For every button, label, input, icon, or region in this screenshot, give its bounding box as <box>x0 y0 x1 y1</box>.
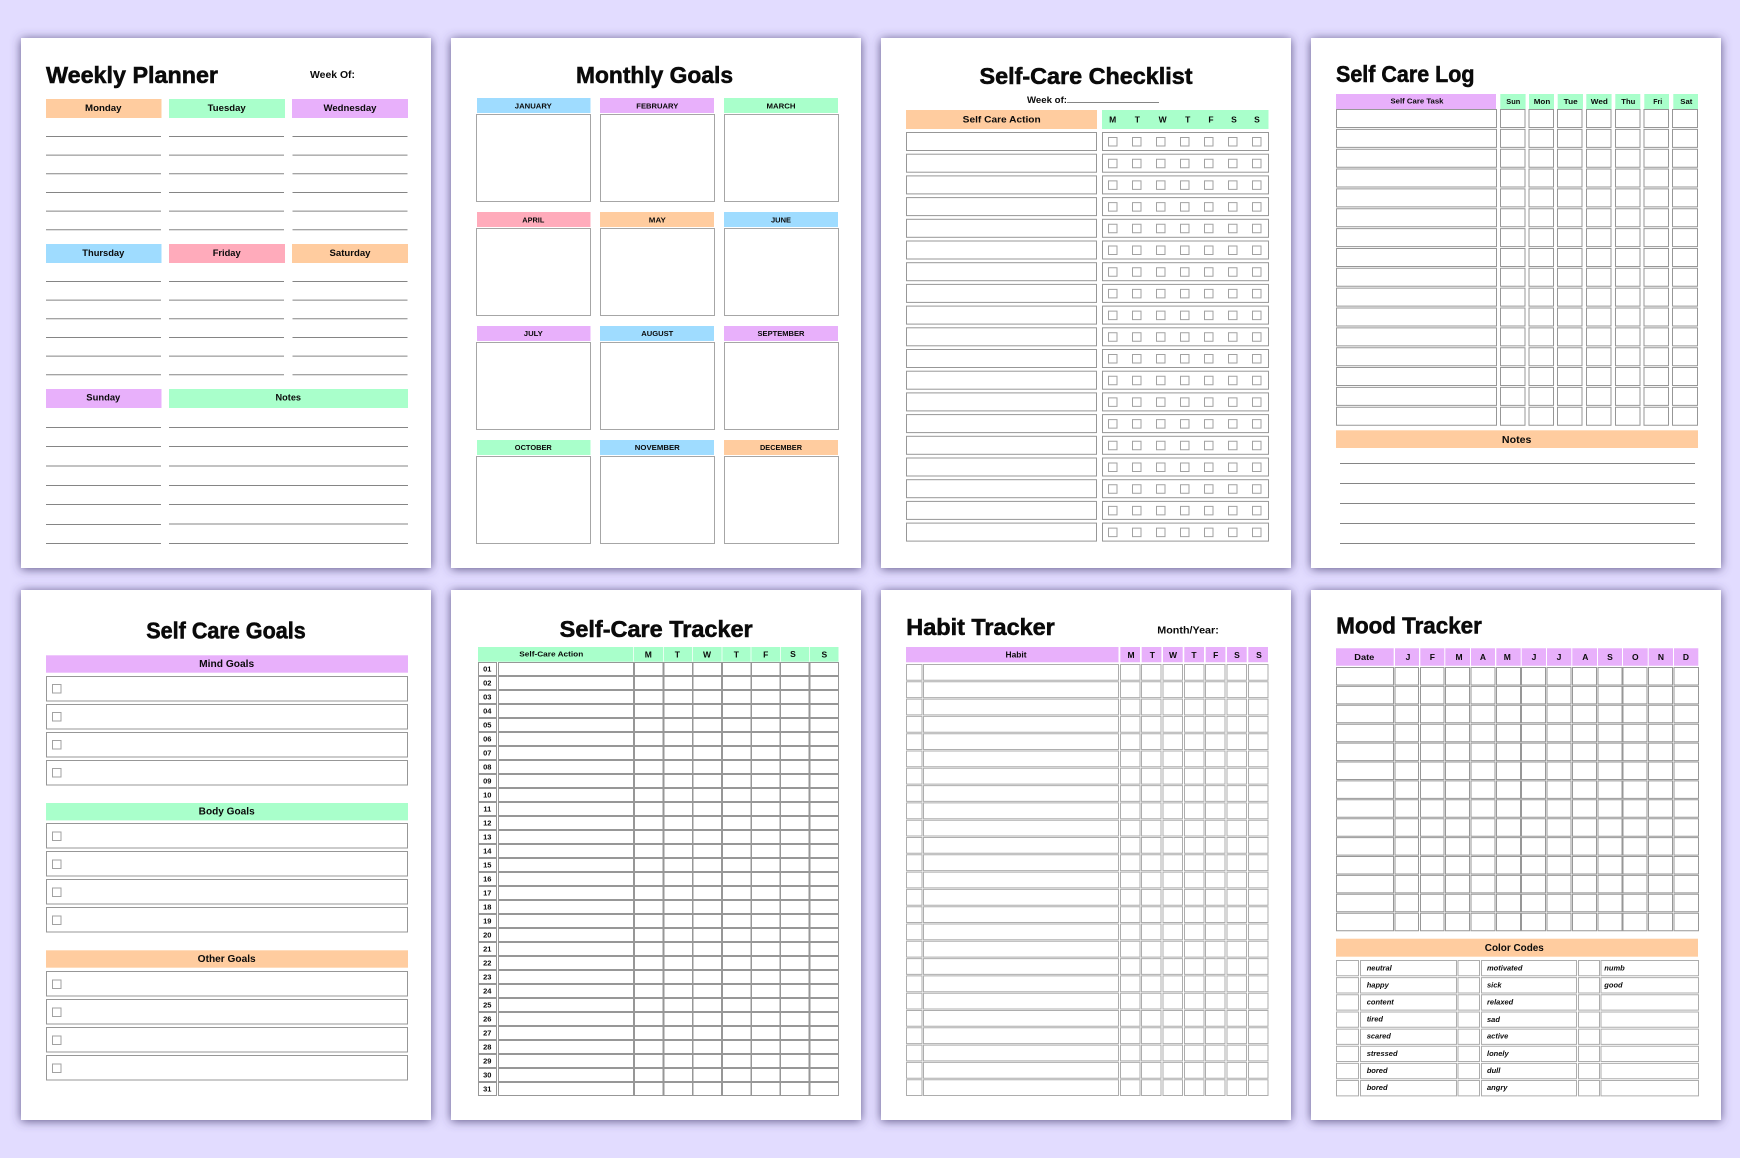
table header: M <box>1127 650 1135 660</box>
day headers row 1 <box>46 99 408 118</box>
table header <box>906 110 1268 129</box>
color codes rows <box>1336 960 1698 1096</box>
month headers: NOVEMBER <box>635 443 680 452</box>
table header: O <box>1632 652 1639 662</box>
color codes labels: motivated <box>1487 964 1523 972</box>
table header: W <box>703 650 712 660</box>
row numbers: 24 <box>483 986 492 996</box>
table header: J <box>1532 652 1537 662</box>
table header: M <box>1504 652 1511 662</box>
table header <box>1336 94 1698 109</box>
writing lines row 3 <box>46 428 408 544</box>
color codes labels: happy <box>1367 980 1390 990</box>
row numbers: 28 <box>483 1042 491 1052</box>
table header: W <box>1159 114 1168 124</box>
table header: Thu <box>1621 97 1636 106</box>
row numbers: 06 <box>483 734 491 744</box>
row numbers: 14 <box>483 846 492 856</box>
section: Mind Goals: Mind Goals <box>199 659 255 670</box>
label: Week Of: Week Of: <box>310 69 355 81</box>
color codes labels: numb <box>1604 964 1625 972</box>
panel: Self-Care Checklist <box>881 38 1291 568</box>
panel: Mood Tracker <box>1311 590 1721 1120</box>
row numbers: 11 <box>483 804 491 814</box>
row numbers: 05 <box>483 720 491 730</box>
title: Monthly Goals: Monthly Goals <box>576 62 733 88</box>
table header: Habit <box>1006 650 1027 660</box>
table header: Mon <box>1534 97 1551 106</box>
table header: A <box>1582 652 1588 662</box>
day headers row 1: Monday <box>85 103 122 114</box>
Sunday and Notes headers: Sunday <box>86 392 121 404</box>
table header: Date <box>1354 653 1375 662</box>
mood grid <box>1336 668 1698 931</box>
panel: Self Care Goals <box>21 590 431 1120</box>
notes header <box>1336 430 1698 448</box>
row numbers: 23 <box>483 972 491 982</box>
table header: F <box>1430 652 1435 662</box>
table header: T <box>1191 650 1197 660</box>
row numbers: 12 <box>483 818 491 828</box>
title: Habit Tracker: Habit Tracker <box>906 614 1055 640</box>
notes lines <box>1340 464 1695 544</box>
row numbers: 03 <box>483 692 491 702</box>
table header: T <box>734 650 740 660</box>
month headers: JANUARY <box>515 102 552 110</box>
table header: M <box>1109 114 1116 124</box>
row numbers: 08 <box>483 762 491 772</box>
row numbers: 25 <box>483 1000 491 1010</box>
color codes labels: tired <box>1367 1014 1383 1024</box>
color codes header: Color Codes <box>1485 943 1544 954</box>
section: Other Goals <box>46 950 408 1080</box>
table header: T <box>1185 114 1191 124</box>
month headers: SEPTEMBER <box>758 329 805 338</box>
table header: T <box>1135 114 1141 124</box>
title: Self Care Log: Self Care Log <box>1336 61 1474 87</box>
section: Mind Goals <box>46 655 408 785</box>
panel: Self-Care Tracker <box>451 590 861 1120</box>
month headers: AUGUST <box>641 329 674 338</box>
row numbers: 07 <box>483 748 491 758</box>
label: Week of <box>1027 95 1159 105</box>
color codes labels: bored <box>1367 1083 1388 1092</box>
table header: Sun <box>1506 97 1521 106</box>
month headers <box>477 98 838 455</box>
row numbers: 17 <box>483 888 491 898</box>
day headers row 1: Tuesday <box>208 103 246 114</box>
table header <box>478 647 838 662</box>
table header: Tue <box>1564 97 1578 106</box>
month headers: OCTOBER <box>515 443 552 452</box>
row numbers: 22 <box>483 958 491 968</box>
title: Self-Care Checklist: Self-Care Checklist <box>980 63 1193 89</box>
label: Week of: Week of: <box>1027 95 1067 105</box>
table header: S <box>1254 114 1260 124</box>
panel: Monthly Goals <box>451 38 861 568</box>
panel: Weekly Planner <box>21 38 431 568</box>
table header: Fri <box>1653 97 1662 106</box>
row numbers: 31 <box>483 1084 491 1094</box>
row numbers: 18 <box>483 902 491 912</box>
table header: F <box>763 650 768 660</box>
table header: Wed <box>1591 97 1608 106</box>
table header: Self Care Task <box>1390 96 1444 106</box>
color codes labels: scared <box>1367 1032 1391 1040</box>
color codes labels: lonely <box>1487 1049 1510 1058</box>
month headers: APRIL <box>522 216 545 224</box>
day headers row 2: Thursday <box>82 248 125 259</box>
color codes header <box>1336 939 1698 957</box>
title: Self Care Goals: Self Care Goals <box>146 617 306 643</box>
table header: Self Care Action <box>963 114 1041 126</box>
table header: Self-Care Action <box>519 649 584 658</box>
table header: T <box>1150 650 1156 660</box>
month headers: MARCH <box>766 102 796 110</box>
table header <box>906 647 1268 662</box>
table header <box>1336 648 1698 666</box>
section: Other Goals: Other Goals <box>198 954 256 965</box>
table header: S <box>1607 652 1613 662</box>
color codes labels: content <box>1367 998 1394 1006</box>
color codes labels <box>1367 964 1625 1092</box>
table header: F <box>1208 114 1214 124</box>
writing lines row 2 <box>46 282 408 375</box>
month headers: DECEMBER <box>760 443 803 452</box>
month headers: JULY <box>524 329 543 338</box>
row numbers: 26 <box>483 1014 491 1024</box>
table header: S <box>790 649 796 659</box>
row numbers: 02 <box>483 678 491 688</box>
color codes labels: neutral <box>1367 964 1393 972</box>
table header: J <box>1406 652 1411 662</box>
row numbers: 10 <box>483 790 491 800</box>
table header: J <box>1557 652 1562 662</box>
month headers: FEBRUARY <box>636 102 678 110</box>
table header: Sat <box>1680 97 1693 106</box>
row numbers: 20 <box>483 930 491 940</box>
table header: S <box>1231 114 1237 124</box>
label: Month/Year: Month/Year: <box>1157 626 1219 636</box>
table header: S <box>1256 650 1262 660</box>
Sunday and Notes headers: Notes <box>276 392 301 404</box>
color codes labels: bored <box>1367 1066 1388 1075</box>
color codes labels: relaxed <box>1487 998 1514 1006</box>
row numbers: 16 <box>483 874 491 884</box>
row numbers: 30 <box>483 1070 491 1080</box>
table header: N <box>1658 652 1664 662</box>
table header: A <box>1480 652 1486 662</box>
section: Body Goals: Body Goals <box>199 806 255 818</box>
writing lines row 1 <box>46 136 408 230</box>
row numbers: 21 <box>483 944 491 954</box>
day headers row 2: Friday <box>213 248 241 259</box>
day headers row 1: Wednesday <box>324 103 377 114</box>
row numbers: 09 <box>483 776 491 786</box>
notes header: Notes <box>1502 434 1532 446</box>
row numbers: 13 <box>483 832 491 842</box>
Sunday and Notes headers <box>46 389 408 408</box>
row numbers: 04 <box>483 706 492 716</box>
row numbers: 19 <box>483 916 491 926</box>
table header: M <box>1455 652 1463 662</box>
checklist rows <box>906 132 1268 541</box>
month boxes <box>476 114 838 544</box>
table header: D <box>1683 652 1689 662</box>
panel: Self Care Log <box>1311 38 1721 568</box>
tracker rows <box>478 662 838 1096</box>
title: Weekly Planner: Weekly Planner <box>46 62 218 88</box>
habit rows <box>906 664 1268 1096</box>
color codes labels: stressed <box>1367 1049 1398 1058</box>
title: Self-Care Tracker: Self-Care Tracker <box>560 616 753 642</box>
table header: S <box>821 650 827 660</box>
color codes labels: sad <box>1487 1015 1500 1024</box>
row numbers: 27 <box>483 1028 491 1038</box>
table header: M <box>645 650 652 660</box>
title: Mood Tracker: Mood Tracker <box>1336 612 1482 638</box>
panel: Habit Tracker <box>881 590 1291 1120</box>
row numbers: 15 <box>483 860 491 870</box>
day headers row 2: Saturday <box>330 248 371 259</box>
color codes labels: sick <box>1487 980 1502 990</box>
color codes labels: angry <box>1487 1083 1508 1092</box>
day headers row 2 <box>46 244 408 263</box>
table header: T <box>675 650 681 660</box>
color codes labels: active <box>1487 1032 1508 1040</box>
month headers: JUNE <box>771 216 791 224</box>
log rows <box>1336 110 1698 425</box>
section: Body Goals <box>46 803 408 932</box>
row numbers <box>483 664 492 1094</box>
color codes labels: dull <box>1487 1066 1501 1075</box>
row numbers: 01 <box>483 664 491 674</box>
month headers: MAY <box>649 216 666 224</box>
color codes labels: good <box>1603 980 1623 990</box>
row numbers: 29 <box>483 1056 491 1066</box>
table header: F <box>1213 650 1218 660</box>
table header: S <box>1234 650 1240 660</box>
table header: W <box>1169 650 1178 660</box>
